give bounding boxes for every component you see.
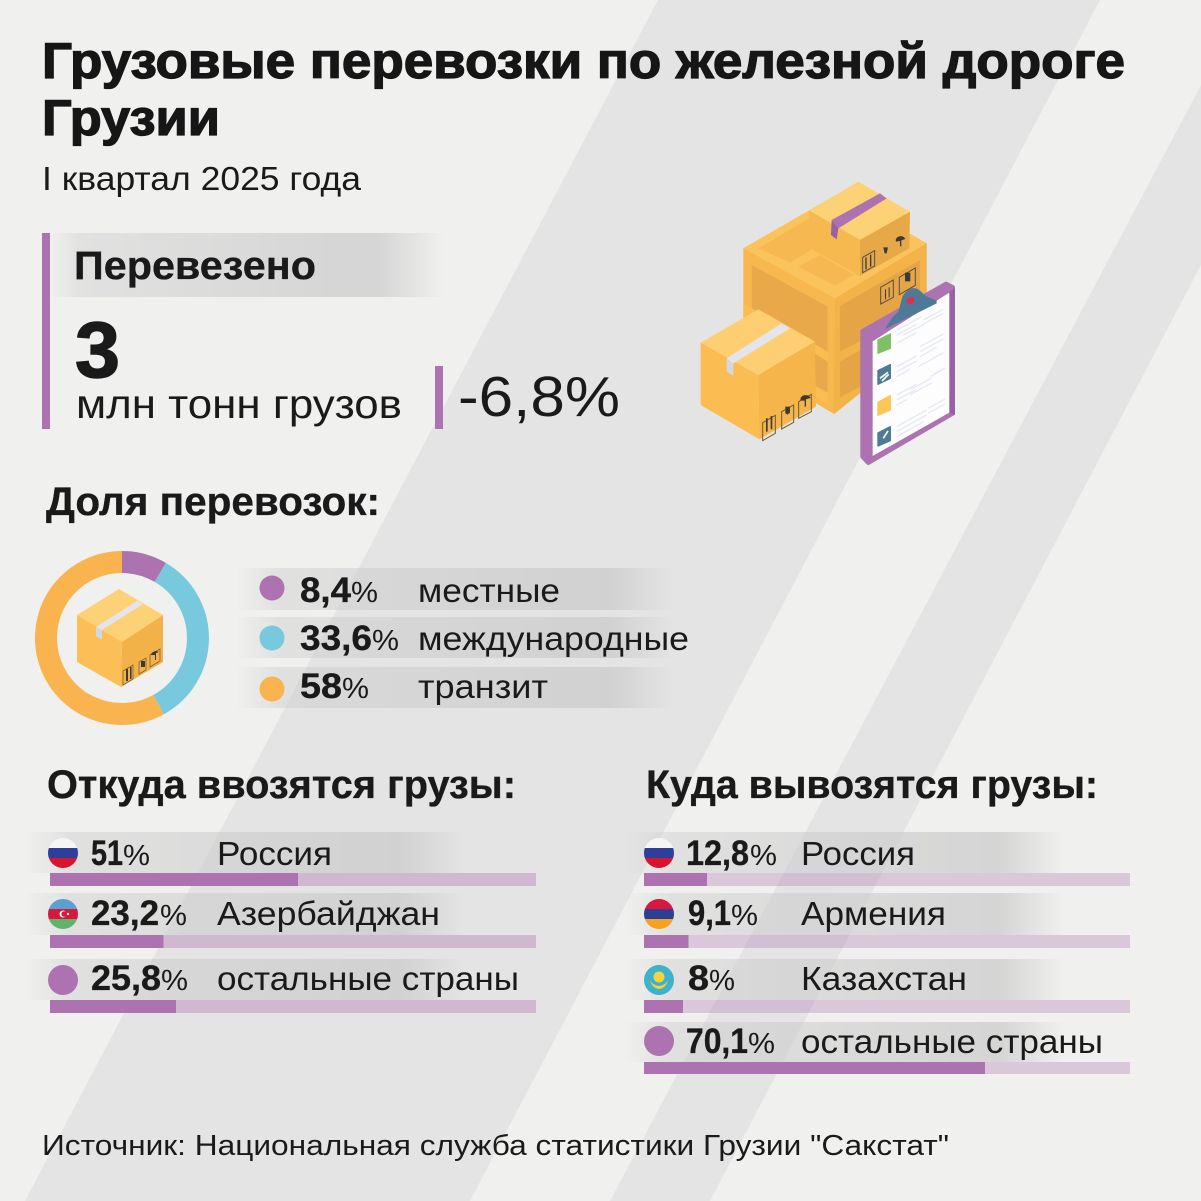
row: international: международные bbox=[418, 620, 689, 657]
row: Russia: 51 bbox=[91, 834, 123, 873]
clipboard bbox=[863, 284, 955, 463]
legend: share rows bbox=[235, 568, 689, 708]
row: international: % bbox=[372, 625, 399, 657]
row: Armenia: % bbox=[731, 900, 758, 932]
row: Russia: 12,8 bbox=[686, 834, 749, 873]
row: Azerbaijan: 23,2 bbox=[91, 894, 159, 933]
row: other countries: % bbox=[748, 1028, 775, 1060]
flag: Russia bbox=[644, 838, 674, 868]
row: transit bbox=[235, 667, 675, 708]
row: other countries: 70,1 bbox=[686, 1022, 748, 1061]
row: other countries bbox=[625, 1022, 1130, 1074]
accent bar bbox=[42, 233, 50, 429]
flag: Azerbaijan bbox=[48, 899, 78, 929]
row: other countries: остальные страны bbox=[801, 1023, 1103, 1060]
row: other countries: остальные страны bbox=[217, 960, 519, 997]
row: transit: 58 bbox=[300, 667, 342, 706]
flag: Russia bbox=[48, 838, 78, 868]
panel: exports bbox=[625, 763, 1130, 1074]
row: Kazakhstan: 8 bbox=[688, 959, 709, 998]
row: other countries bbox=[25, 959, 536, 1013]
front box bbox=[701, 309, 816, 441]
title bbox=[42, 33, 1125, 146]
row: Azerbaijan bbox=[25, 893, 536, 948]
row: Azerbaijan: Азербайджан bbox=[217, 895, 440, 932]
row: international: 33,6 bbox=[300, 619, 372, 658]
row: other countries: 25,8 bbox=[91, 959, 161, 998]
heading: share of shipments: Доля перевозок: bbox=[46, 480, 380, 524]
panel: transported volume bbox=[42, 233, 620, 429]
change value: -6,8% bbox=[458, 365, 620, 429]
row: Russia: % bbox=[123, 840, 150, 872]
heading: Перевезено bbox=[74, 244, 316, 288]
row: Armenia bbox=[625, 893, 1130, 948]
row: Armenia: 9,1 bbox=[688, 894, 731, 933]
checklist boxes bbox=[878, 334, 890, 446]
row: local bbox=[235, 568, 675, 610]
source note: Источник: Национальная служба статистики Грузии "Сакстат" bbox=[42, 1130, 949, 1162]
row: Azerbaijan: % bbox=[160, 900, 187, 932]
large crate bbox=[743, 193, 927, 414]
small top box bbox=[809, 182, 910, 276]
title: Грузии bbox=[42, 90, 220, 146]
flag: Armenia bbox=[644, 899, 674, 929]
donut chart bbox=[46, 562, 198, 714]
row: Armenia: Армения bbox=[801, 895, 946, 932]
row: Russia: % bbox=[750, 840, 777, 872]
icon: box in donut bbox=[77, 589, 163, 687]
heading: Откуда ввозятся грузы: bbox=[47, 763, 516, 807]
row: Russia: Россия bbox=[801, 835, 915, 872]
row: other countries: % bbox=[161, 965, 188, 997]
heading: Куда вывозятся грузы: bbox=[646, 763, 1098, 807]
big number: 3 bbox=[75, 305, 120, 394]
row: Russia: Россия bbox=[217, 835, 332, 872]
icon: boxes and clipboard bbox=[701, 182, 955, 463]
row: transit: транзит bbox=[418, 668, 548, 705]
row: international bbox=[235, 617, 689, 658]
row: local: % bbox=[351, 577, 378, 609]
row: Kazakhstan bbox=[625, 959, 1130, 1013]
checklist text lines bbox=[897, 309, 945, 437]
row: local: 8,4 bbox=[300, 571, 352, 610]
panel: imports bbox=[25, 763, 536, 1013]
row: Kazakhstan: % bbox=[709, 965, 735, 997]
row: Russia bbox=[625, 832, 1130, 886]
title: Грузовые перевозки по железной дороге bbox=[42, 33, 1125, 89]
row: local: местные bbox=[418, 572, 560, 609]
row: transit: % bbox=[342, 673, 369, 705]
subtitle: I квартал 2025 года bbox=[42, 160, 362, 197]
flag: Kazakhstan bbox=[644, 965, 674, 995]
row: Russia bbox=[25, 832, 536, 886]
change accent bar bbox=[435, 366, 443, 429]
unit: млн тонн грузов bbox=[76, 381, 402, 427]
heading band bbox=[50, 233, 445, 297]
row: Kazakhstan: Казахстан bbox=[801, 960, 967, 997]
